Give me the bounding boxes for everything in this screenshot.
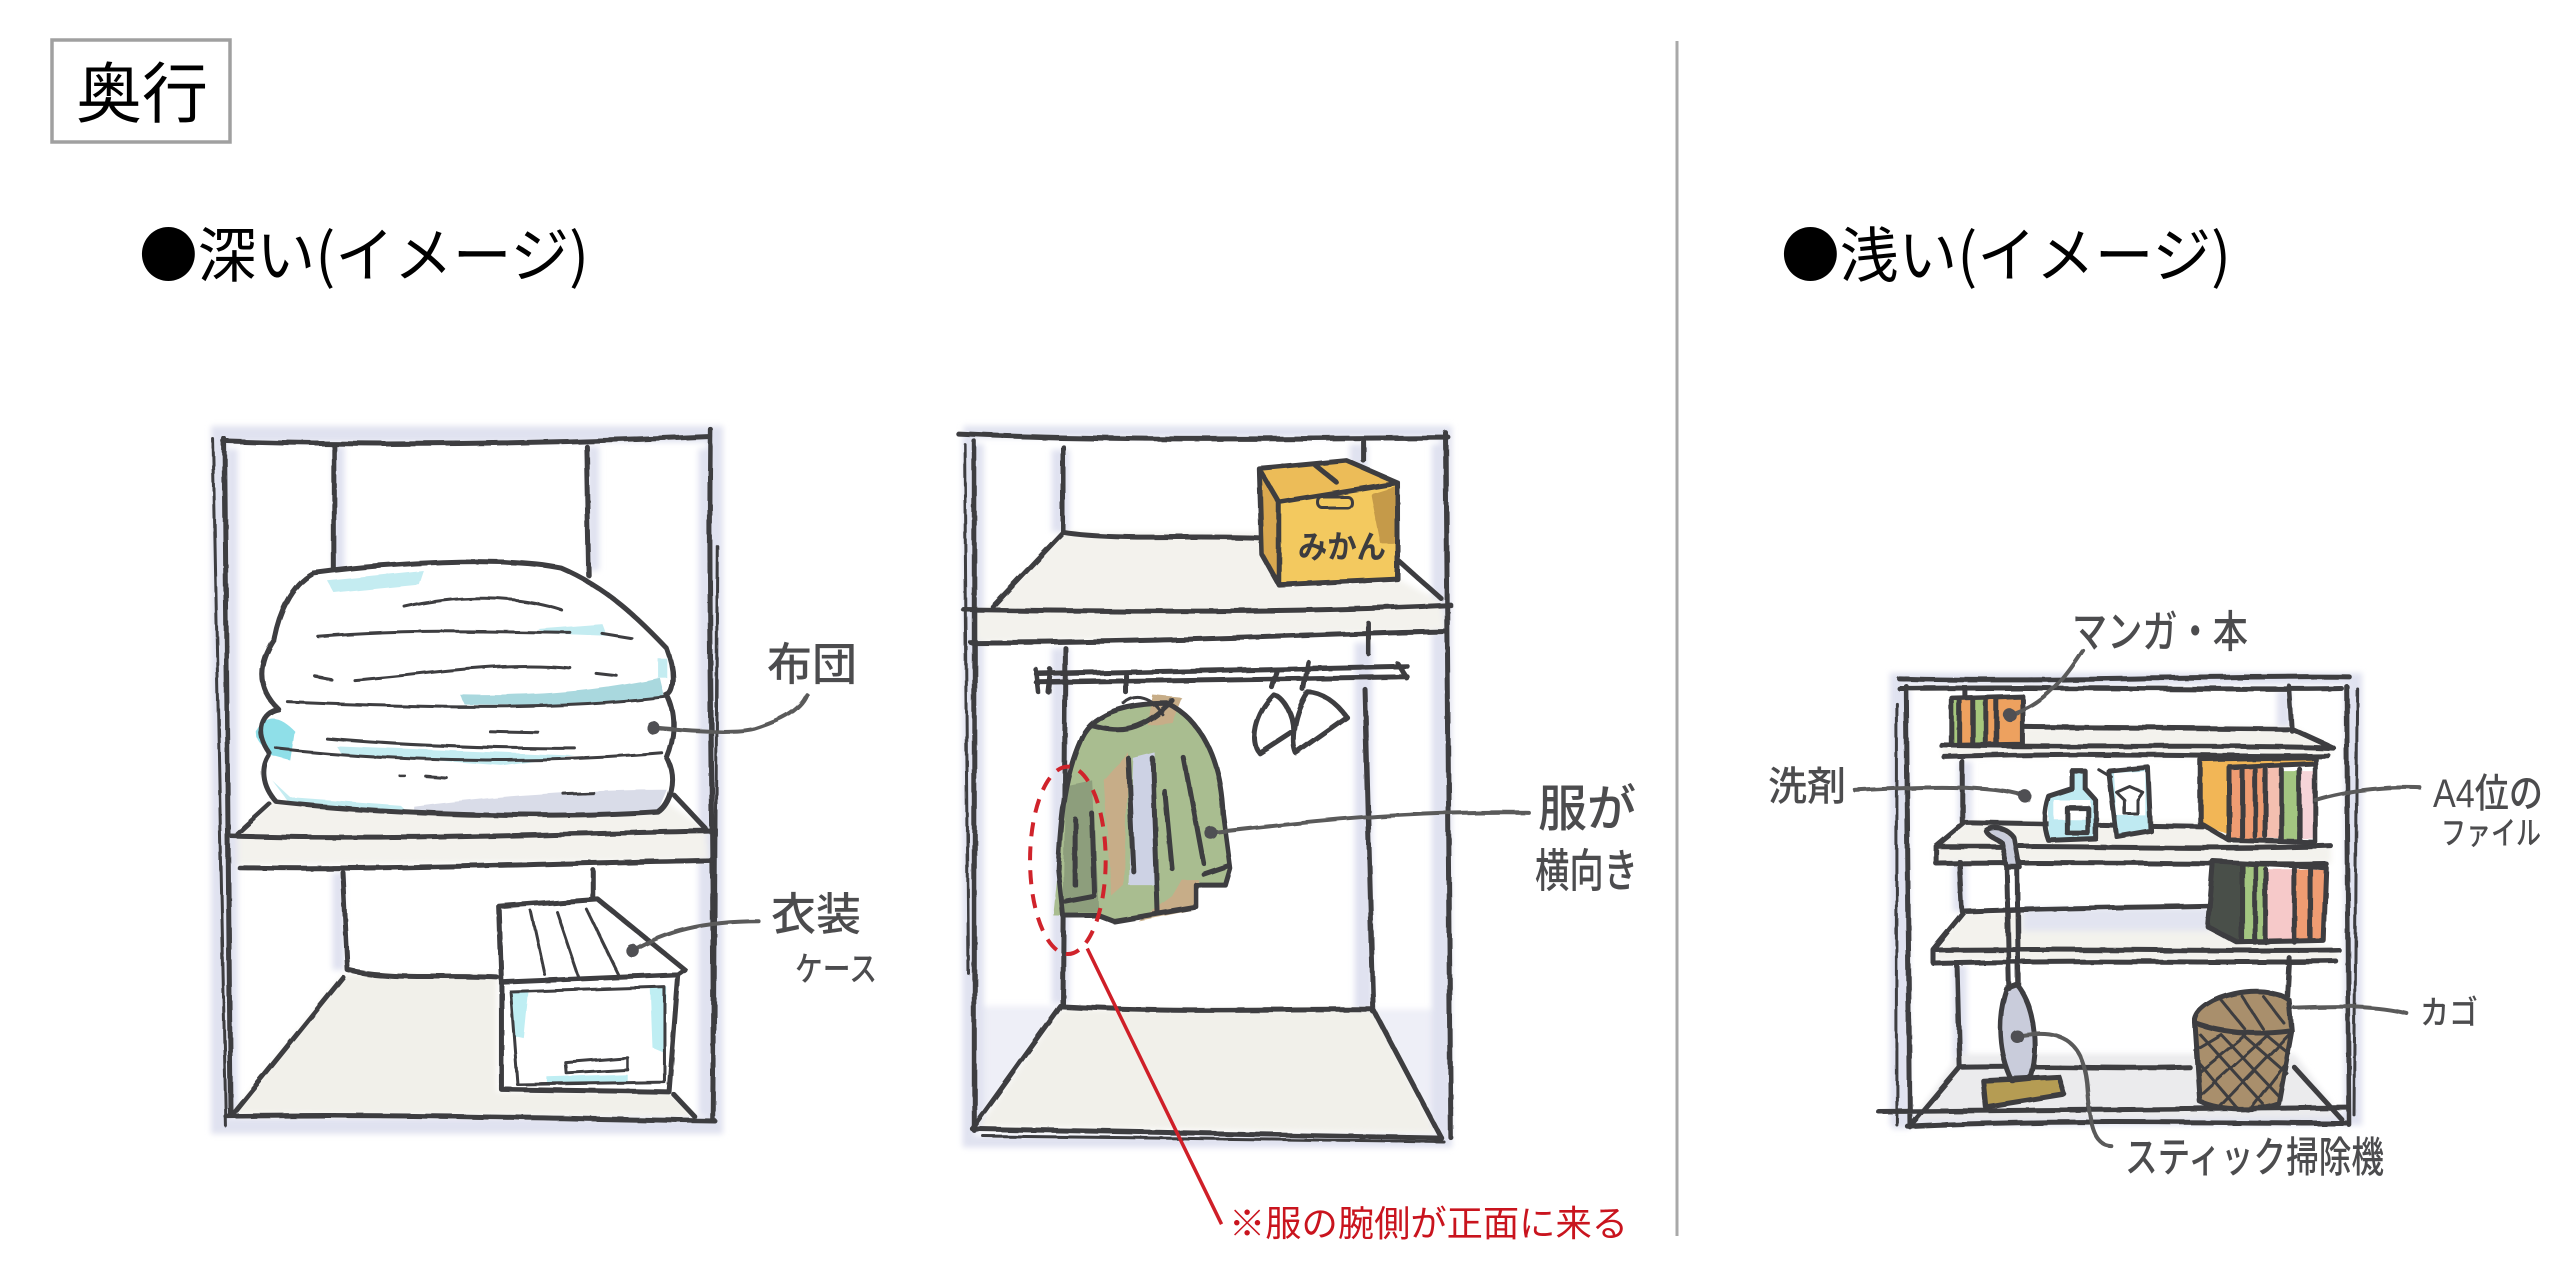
label: sideways: 横向き [1535,845,1638,897]
tag box: depth: 奥行 [76,57,208,131]
label: detergent: 洗剤 [1768,765,1846,809]
leader lines [2009,650,2083,715]
label: manga and books: マンガ・本 [2072,608,2248,657]
tag box: depth [52,40,230,142]
hangers [1255,692,1347,753]
label: futon: 布団 [767,639,857,690]
books [1952,696,2022,745]
label: stick vacuum: スティック掃除機 [2125,1134,2384,1181]
label: clothes: 衣装 [771,889,861,940]
illustration: deep closet with futon and clothes case [213,429,807,1126]
heading: shallow: ●浅い(イメージ) [1781,208,2231,295]
vertical divider [1676,41,1678,1236]
illustration: shallow shelf [1855,650,2420,1146]
red note: ※服の腕側が正面に来る [1229,1203,1628,1244]
detergent bottles [2045,767,2151,840]
stick vacuum [1983,828,2064,1107]
lower files [2208,862,2326,942]
leader line [1211,812,1528,833]
leader lines [653,695,807,732]
box label: みかん [1298,529,1386,565]
closet frame [213,429,717,1126]
upper files [2200,758,2315,842]
cardboard box [1259,461,1398,585]
hanging rod [1036,662,1407,692]
futon [256,562,674,816]
closet frame [959,433,1451,1141]
shelf frame [1879,677,2357,1127]
basket [2195,991,2292,1110]
label: basket: カゴ [2420,994,2478,1031]
illustration: deep closet with hanging clothes and box [959,432,1528,1224]
red dashed ellipse [1030,767,1106,954]
label: case: ケース [795,951,877,989]
heading: deep: ●深い(イメージ) [139,208,589,295]
red callout line [1087,949,1222,1224]
jacket [1053,695,1230,921]
label: clothes sideways: 服が [1538,781,1636,837]
label: A4 size: A4位の [2433,772,2543,816]
clothes case [499,899,685,1092]
